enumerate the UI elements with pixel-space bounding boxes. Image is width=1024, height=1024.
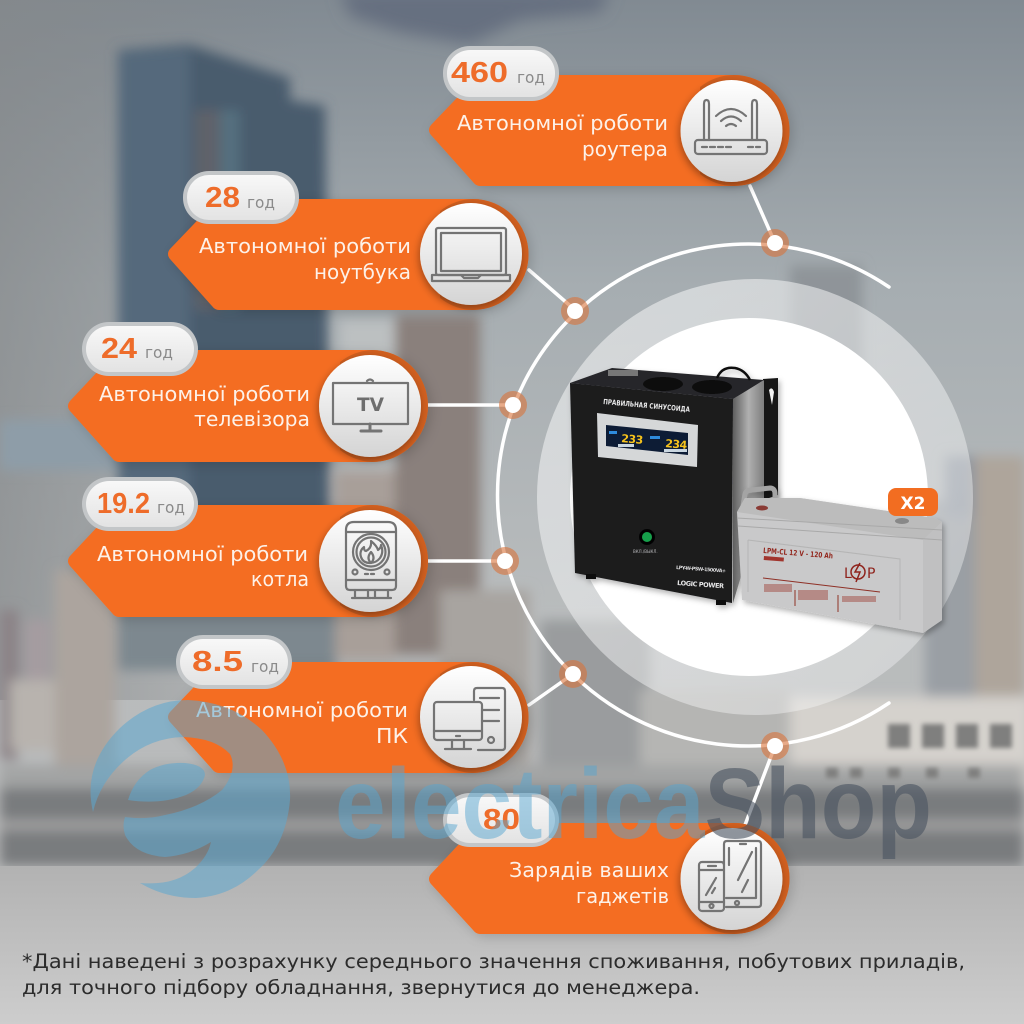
- value pill: [82, 322, 198, 376]
- unit: год: [247, 193, 275, 212]
- value pill: [183, 171, 299, 224]
- badge: x2: X2: [901, 494, 925, 514]
- tv icon: TV: [357, 394, 384, 416]
- model text: LPY-W-PSW-1500VA+: [676, 565, 726, 574]
- label: гаджетів: [576, 884, 669, 908]
- unit: год: [517, 68, 545, 87]
- label: роутера: [582, 137, 668, 161]
- ribbon: [429, 75, 790, 186]
- value pill: [82, 477, 198, 531]
- badge: x2: [888, 488, 938, 516]
- battery logo: L: [844, 566, 852, 582]
- icon circle: [680, 828, 782, 930]
- central translucent circle: [537, 279, 973, 715]
- product: inverter: [570, 368, 778, 605]
- icon circle: [680, 80, 782, 182]
- central white circle: [570, 318, 928, 676]
- ribbon: [168, 662, 528, 773]
- boiler icon: [346, 522, 396, 598]
- tv icon: [333, 380, 408, 431]
- battery handle: [743, 488, 775, 506]
- item: boiler: [68, 477, 428, 617]
- icon ring: [440, 199, 528, 310]
- value pill: [176, 635, 292, 689]
- label: [199, 234, 411, 284]
- label: Автономної роботи: [99, 382, 310, 406]
- battery logo: P: [867, 566, 875, 582]
- item: desktop pc: [168, 635, 528, 773]
- footnote: [22, 950, 965, 999]
- icon circle: [319, 510, 421, 612]
- inverter front: [570, 383, 733, 603]
- label: Автономної роботи: [199, 234, 411, 258]
- tablet and phone icon: [699, 841, 761, 911]
- value: 28: [205, 182, 240, 214]
- battery logo: [844, 563, 875, 582]
- label: [509, 858, 669, 908]
- ribbon: [168, 199, 528, 310]
- value: 19.2: [97, 488, 150, 520]
- inverter wall bracket: [763, 378, 778, 500]
- battery case: [737, 498, 942, 633]
- value: 460: [451, 57, 508, 89]
- icon ring: [340, 350, 428, 462]
- display readings: 233: [621, 432, 644, 447]
- item: router: [429, 46, 790, 186]
- watermark text: electricaShop: [335, 748, 932, 860]
- product: battery: [737, 488, 942, 633]
- ring nodes: [491, 229, 789, 760]
- display readings: [621, 432, 688, 452]
- label: ПК: [376, 724, 408, 748]
- label: Автономної роботи: [457, 111, 668, 135]
- label: Автономної роботи: [196, 698, 408, 722]
- display readings: 234: [665, 437, 688, 452]
- button caption: ВКЛ./ВЫКЛ.: [633, 549, 658, 554]
- icon ring: [700, 75, 790, 186]
- battery label: LPM-CL 12 V - 120 Ah: [763, 546, 833, 560]
- label: [457, 111, 668, 161]
- pc icon: [434, 688, 505, 750]
- unit: год: [145, 343, 173, 362]
- power button: [639, 529, 655, 545]
- ribbon: [68, 505, 428, 617]
- ribbon: [429, 823, 790, 934]
- item: television: [68, 322, 428, 462]
- ribbon: [68, 350, 428, 462]
- battery small print: [764, 584, 876, 602]
- footnote: для точного підбору обладнання, звернутися до менеджера.: [22, 976, 700, 999]
- value: 24: [101, 333, 137, 365]
- label: [99, 382, 310, 431]
- icon ring: [700, 823, 790, 934]
- brand text: LOGIC POWER: [677, 579, 724, 590]
- laptop icon: [432, 228, 510, 281]
- value: 80: [483, 804, 520, 836]
- display panel: [597, 413, 698, 467]
- item: gadgets: [429, 793, 790, 934]
- connector lines and ring: [428, 186, 889, 825]
- label: [97, 542, 309, 591]
- footnote: *Дані наведені з розрахунку середнього значення споживання, побутових приладів,: [22, 950, 965, 973]
- label: ноутбука: [314, 260, 411, 284]
- label: котла: [251, 567, 309, 591]
- watermark logo: [91, 700, 290, 898]
- label: [196, 698, 408, 748]
- icon circle: [420, 666, 522, 768]
- watermark: [91, 700, 932, 898]
- inverter top: [570, 368, 764, 399]
- icon circle: [319, 355, 421, 457]
- value pill: [443, 793, 559, 847]
- unit: год: [157, 498, 185, 517]
- value: 8.5: [192, 646, 243, 678]
- icon circle: [420, 203, 522, 305]
- icon ring: [440, 662, 528, 773]
- inverter heading: ПРАВИЛЬНАЯ СИНУСОИДА: [603, 397, 691, 414]
- item: laptop: [168, 171, 528, 310]
- unit: год: [251, 657, 279, 676]
- label: телевізора: [194, 407, 310, 431]
- value pill: [443, 46, 559, 101]
- icon ring: [340, 505, 428, 617]
- label: Автономної роботи: [97, 542, 308, 566]
- label: Зарядів ваших: [509, 858, 669, 882]
- router icon: [695, 100, 767, 154]
